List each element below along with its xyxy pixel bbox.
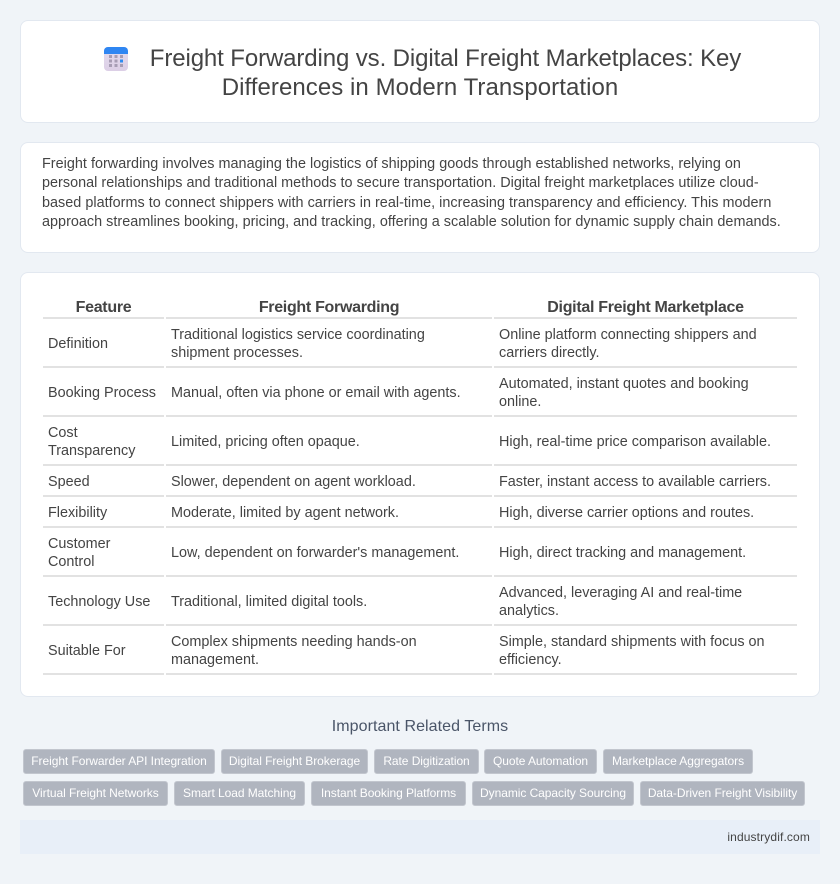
- tag: Smart Load Matching: [183, 786, 296, 800]
- panel: comparison table: [20, 272, 820, 697]
- text block: description: approach streamlines booking, pricing, and tracking, offering a scalable solution for dynamic supply chain demands.: [42, 214, 781, 230]
- tag: [23, 749, 215, 774]
- tag: Quote Automation: [493, 754, 588, 768]
- tag: Instant Booking Platforms: [321, 786, 456, 800]
- panel: comparison table: Complex shipments needing hands-on: [171, 634, 417, 650]
- panel: description: [20, 142, 820, 253]
- tag: Dynamic Capacity Sourcing: [480, 786, 626, 800]
- tag: [484, 749, 597, 774]
- table header: feature: Feature: [76, 299, 131, 316]
- title: Freight Forwarding vs. Digital Freight Marketplaces: Key: [150, 45, 741, 72]
- row: cost transparency: [48, 425, 136, 459]
- panel: comparison table: Traditional, limited digital tools.: [171, 594, 367, 610]
- panel: header: [20, 20, 820, 123]
- text block: description: Freight forwarding involves managing the logistics of shipping goods through established networks, relying on: [42, 156, 741, 172]
- tag: Digital Freight Brokerage: [229, 754, 360, 768]
- title: [150, 45, 742, 101]
- panel: comparison table: Automated, instant quotes and booking: [499, 376, 749, 392]
- tag: [374, 749, 479, 774]
- text block: description: based platforms to connect shippers with carriers in real-time, increasing transparency and efficiency. This modern: [42, 195, 771, 211]
- panel: comparison table: Moderate, limited by agent network.: [171, 505, 399, 521]
- row: suitable for: Suitable For: [48, 643, 126, 659]
- tag: Virtual Freight Networks: [32, 786, 159, 800]
- heading: important related terms: Important Related Terms: [332, 718, 508, 735]
- panel: comparison table: Slower, dependent on agent workload.: [171, 474, 416, 490]
- text block: description: personal relationships and traditional methods to secure transportation. Digital freight marketplaces utilize cloud-: [42, 175, 759, 191]
- tag: Data-Driven Freight Visibility: [648, 786, 797, 800]
- panel: comparison table: High, diverse carrier options and routes.: [499, 505, 754, 521]
- panel: comparison table: efficiency.: [499, 652, 562, 668]
- row: customer control: Customer: [48, 536, 110, 552]
- row: cost transparency: Cost: [48, 425, 78, 441]
- table header: freight forwarding: Freight Forwarding: [259, 299, 399, 316]
- tag: [221, 749, 368, 774]
- row: booking process: Booking Process: [48, 385, 156, 401]
- tag group: related terms: [23, 749, 805, 806]
- panel: comparison table: management.: [171, 652, 259, 668]
- tag: [472, 781, 634, 806]
- row: speed: Speed: [48, 474, 90, 490]
- row: customer control: [48, 536, 110, 570]
- panel: comparison table: Low, dependent on forwarder's management.: [171, 545, 459, 561]
- text block: description: [42, 156, 781, 230]
- row: customer control: Control: [48, 554, 94, 570]
- tag: Marketplace Aggregators: [612, 754, 744, 768]
- tag: [174, 781, 305, 806]
- panel: comparison table: Advanced, leveraging AI and real-time: [499, 585, 742, 601]
- tag: [603, 749, 753, 774]
- panel: comparison table: Traditional logistics service coordinating: [171, 327, 425, 343]
- tag: [311, 781, 466, 806]
- row: technology use: Technology Use: [48, 594, 150, 610]
- footer bar: [20, 820, 820, 854]
- footer source: industrydif.com: [727, 830, 810, 844]
- tag: [23, 781, 168, 806]
- panel: comparison table: High, real-time price comparison available.: [499, 434, 771, 450]
- tag: Rate Digitization: [383, 754, 470, 768]
- panel: comparison table: online.: [499, 394, 541, 410]
- tag: Freight Forwarder API Integration: [31, 754, 207, 768]
- row: definition: Definition: [48, 336, 108, 352]
- icon: calendar: [104, 47, 128, 71]
- title: Differences in Modern Transportation: [222, 74, 618, 101]
- panel: comparison table: Simple, standard shipments with focus on: [499, 634, 765, 650]
- tag: [640, 781, 805, 806]
- panel: comparison table: Online platform connecting shippers and: [499, 327, 757, 343]
- table header: digital freight marketplace: Digital Freight Marketplace: [547, 299, 744, 316]
- row: flexibility: Flexibility: [48, 505, 107, 521]
- panel: comparison table: Limited, pricing often opaque.: [171, 434, 360, 450]
- panel: comparison table: analytics.: [499, 603, 559, 619]
- row: cost transparency: Transparency: [48, 443, 135, 459]
- panel: comparison table: carriers directly.: [499, 345, 599, 361]
- panel: comparison table: High, direct tracking and management.: [499, 545, 746, 561]
- panel: comparison table: Faster, instant access to available carriers.: [499, 474, 771, 490]
- panel: comparison table: Manual, often via phone or email with agents.: [171, 385, 461, 401]
- panel: comparison table: shipment processes.: [171, 345, 303, 361]
